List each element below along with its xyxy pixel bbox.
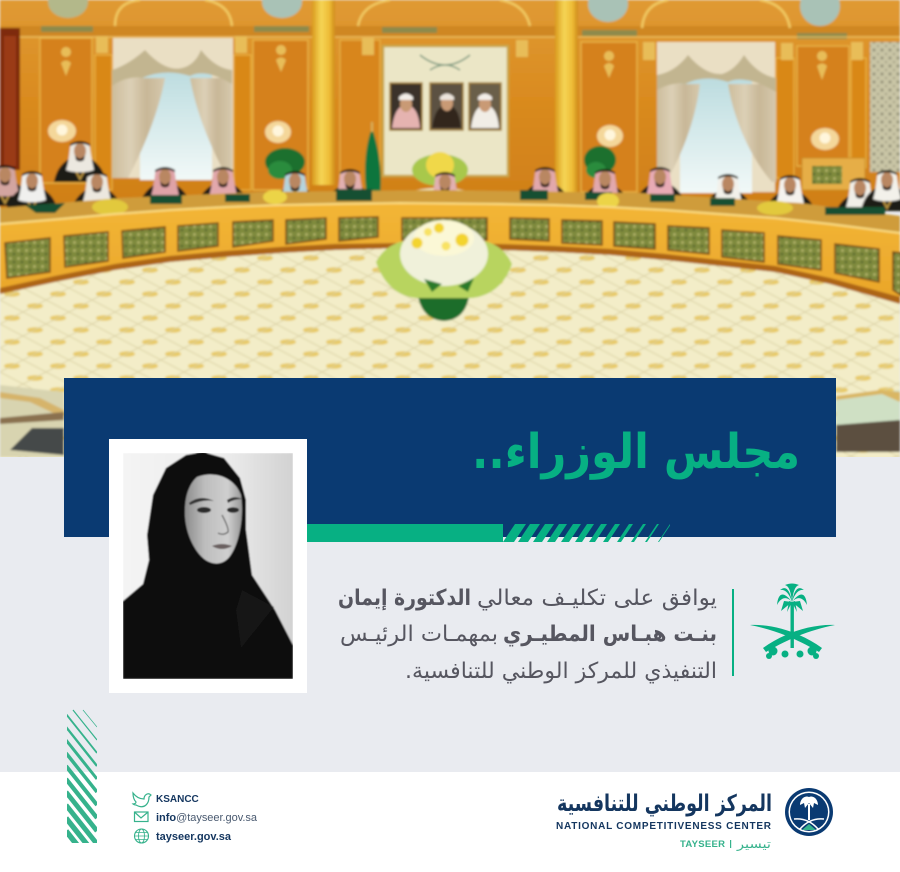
logo Arabic name: المركز الوطني للتنافسية <box>557 791 772 817</box>
right window and curtains <box>657 42 776 193</box>
centerpiece flowers <box>376 220 512 321</box>
title: مجلس الوزراء.. <box>472 424 800 480</box>
left window and curtains <box>112 38 233 180</box>
minister portrait frame <box>109 439 307 693</box>
contact: email: info@tayseer.gov.sa <box>156 812 258 824</box>
line 1: يوافق على تكليـف معالي <box>477 586 717 611</box>
logo: National Competitiveness Center <box>556 788 833 852</box>
Saudi flag <box>365 122 381 197</box>
wall ornaments <box>48 0 863 80</box>
navy title panel <box>64 378 836 537</box>
back flowers <box>410 150 470 192</box>
contact: website <box>134 829 232 843</box>
wall lamps <box>48 120 839 150</box>
desk corners <box>0 385 900 457</box>
photo: cabinet meeting hall <box>0 0 900 460</box>
logo English name: NATIONAL COMPETITIVENESS CENTER <box>556 821 772 832</box>
contact: twitter: KSANCC <box>156 794 199 805</box>
diagonal stripes decoration <box>67 710 97 843</box>
plants <box>265 146 616 179</box>
wall <box>0 0 900 210</box>
crossed swords <box>750 625 835 659</box>
vertical divider <box>732 589 734 676</box>
logo Tayseer line <box>680 837 771 852</box>
line 2: بنـت هبـاس المطيـري <box>503 622 717 647</box>
palm <box>777 584 807 648</box>
line 3: التنفيذي للمركز الوطني للتنافسية. <box>405 659 717 684</box>
line 2: بمهمـات الرئيـس <box>340 622 498 647</box>
seated ministers <box>0 141 900 219</box>
line 1 <box>338 586 717 611</box>
carpet <box>0 240 900 460</box>
Saudi emblem: palm and crossed swords <box>750 584 835 659</box>
golden columns <box>312 0 578 195</box>
back lectern <box>802 158 865 190</box>
footer band <box>0 772 900 872</box>
line 1: الدكتورة إيمان <box>338 586 471 611</box>
framed portraits <box>383 46 508 176</box>
table top desk items <box>0 189 900 235</box>
announcement text <box>338 586 717 684</box>
right damask wall <box>870 42 900 172</box>
logo Tayseer line: TAYSEER <box>680 839 725 850</box>
green accent strip with hatching <box>306 524 671 542</box>
curved table front <box>0 203 900 304</box>
contact: twitter <box>133 793 199 807</box>
logo emblem <box>785 788 833 836</box>
line 2 <box>340 622 717 647</box>
logo Tayseer line: تيسير <box>736 837 771 852</box>
contact: website: tayseer.gov.sa <box>156 831 232 843</box>
table panels <box>5 217 900 296</box>
